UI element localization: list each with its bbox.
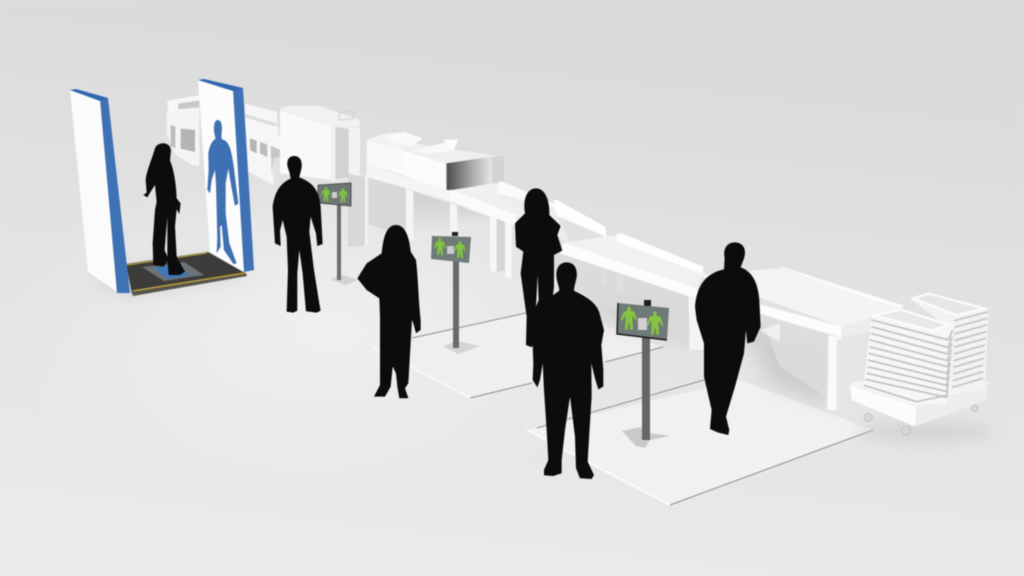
floor glow left xyxy=(0,160,660,500)
kiosk pole xyxy=(642,336,650,440)
shadows under equipment xyxy=(88,255,995,440)
scanner box xyxy=(280,105,360,182)
main conveyor xyxy=(348,132,703,350)
rear machine and trays xyxy=(167,95,360,185)
right panel xyxy=(198,79,254,272)
cart wheels xyxy=(864,405,978,435)
kiosk 1 xyxy=(318,183,358,285)
mat 2 xyxy=(373,320,663,398)
silhouette: woman with hand on hip xyxy=(357,225,421,398)
kiosk 3 xyxy=(617,300,670,448)
silhouette: man near kiosk 1 xyxy=(273,156,323,313)
silhouette: woman seen from behind xyxy=(515,188,562,347)
rear conveyor xyxy=(245,104,293,185)
kiosk base xyxy=(330,275,358,285)
scanner tunnel body xyxy=(367,132,504,202)
rear tray stack xyxy=(910,293,988,393)
kiosk screen xyxy=(431,236,471,263)
left panel xyxy=(70,89,130,293)
floor mats xyxy=(373,313,873,505)
mat 3 xyxy=(527,380,873,505)
tray cart xyxy=(850,293,988,435)
silhouette: woman in scanner xyxy=(143,143,185,275)
cart tub xyxy=(850,381,988,427)
kiosk base xyxy=(622,427,670,448)
kiosk screen xyxy=(617,303,669,340)
end table xyxy=(688,267,905,410)
mat 1 xyxy=(412,313,545,356)
kiosk base xyxy=(443,341,480,354)
kiosk screen xyxy=(318,183,351,206)
rear table xyxy=(167,95,199,166)
scanner floor mat xyxy=(126,252,247,296)
silhouette: right man xyxy=(695,242,761,435)
icon: blue body silhouette on panel xyxy=(207,120,238,264)
body scanner portal xyxy=(70,79,254,296)
kiosk pole xyxy=(337,205,341,280)
kiosk 2 xyxy=(431,232,480,354)
conveyor section 2 xyxy=(560,233,703,300)
kiosk pole xyxy=(453,260,459,348)
conveyor section 1 xyxy=(450,181,607,243)
front tray stack xyxy=(863,308,953,405)
support walls under conveyor xyxy=(348,173,698,350)
silhouette: front man xyxy=(528,262,604,479)
